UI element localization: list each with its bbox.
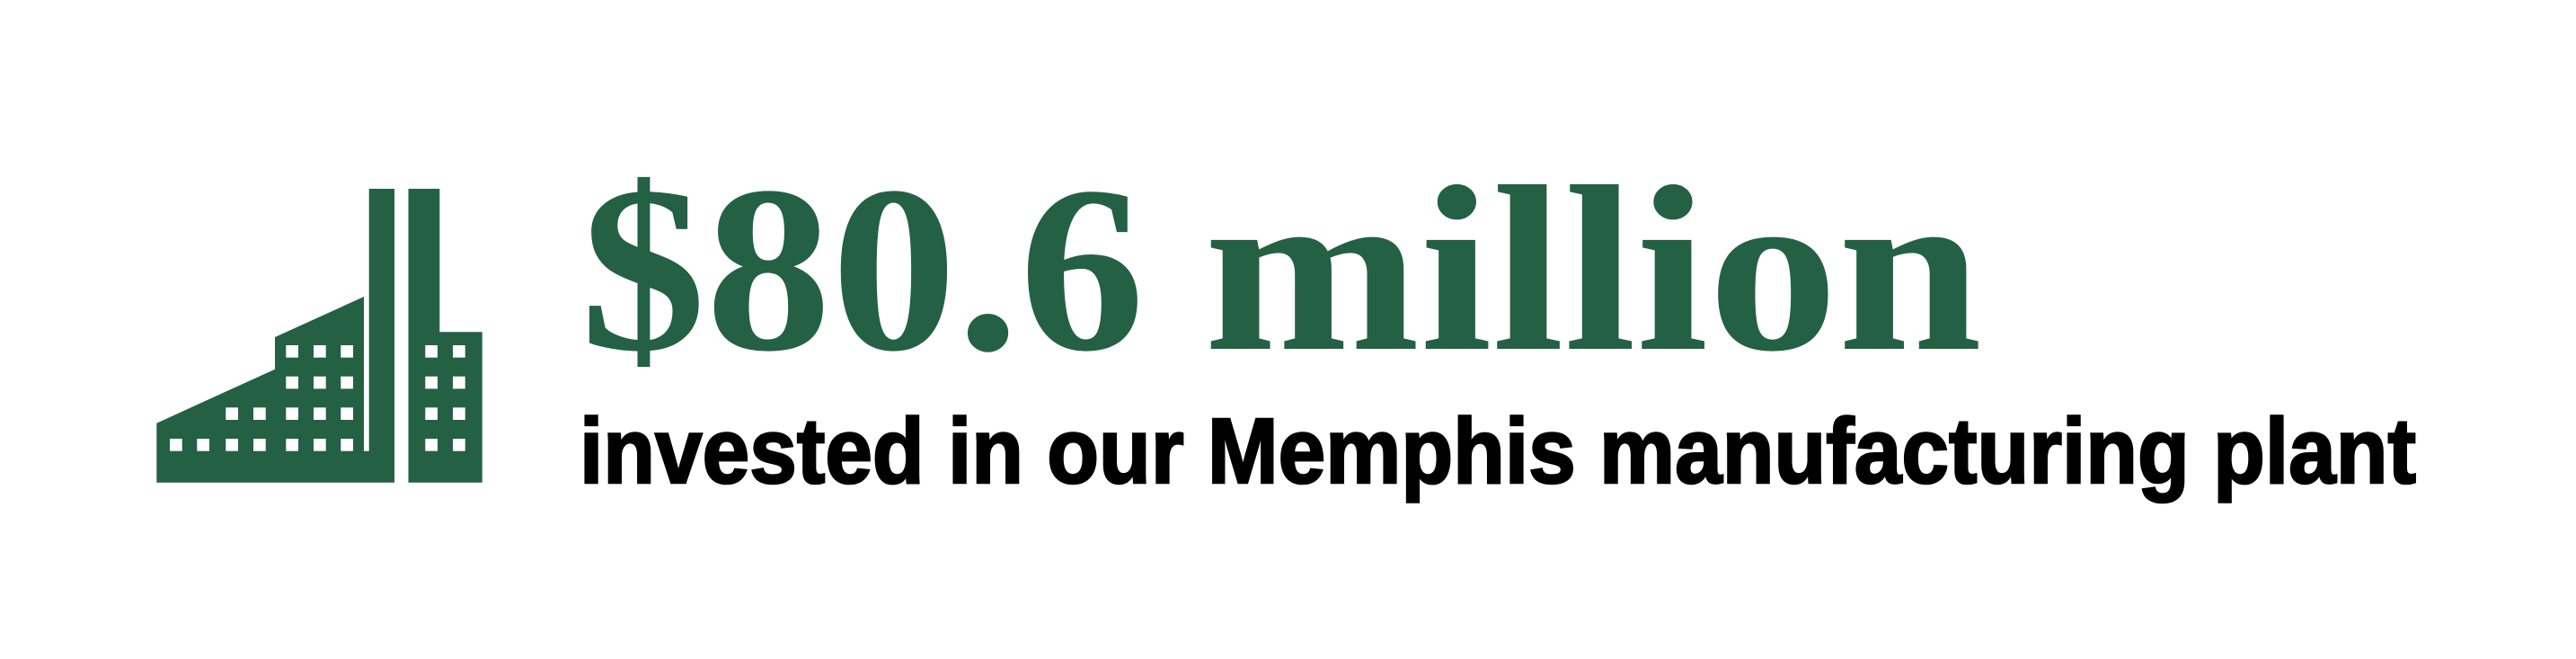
heading: investment amount: million <box>1204 138 1982 401</box>
heading: investment amount <box>580 138 1982 401</box>
icon: factory <box>156 189 482 483</box>
heading: investment amount: $80.6 <box>580 138 1145 401</box>
text: description: invested in our Memphis manufacturing plant <box>580 399 2416 503</box>
